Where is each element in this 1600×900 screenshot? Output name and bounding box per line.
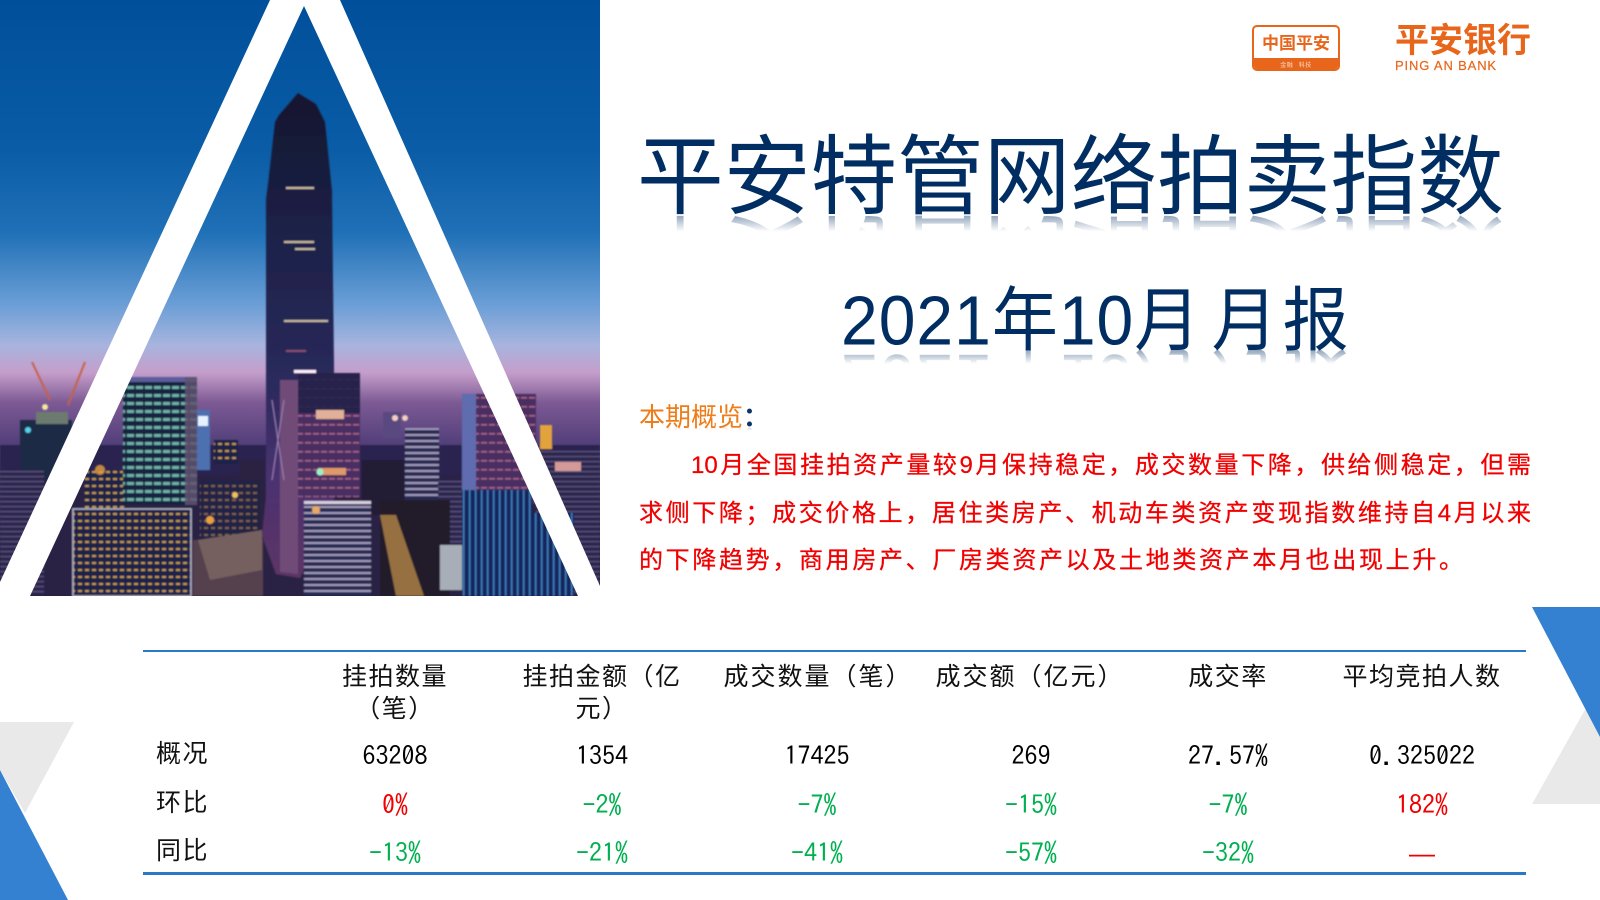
data table: -13% — [369, 840, 421, 866]
data table: 182% — [1396, 792, 1448, 818]
data table: 27. 57% — [1188, 743, 1268, 769]
data table: -21% — [576, 840, 628, 866]
data table: -2% — [582, 792, 622, 818]
data table: 1354 — [576, 743, 628, 769]
data table: （笔） — [355, 689, 435, 725]
data table: -41% — [791, 840, 843, 866]
white triangle frame — [0, 0, 600, 596]
logo: Ping An group — [1252, 25, 1340, 71]
data table: — — [1409, 838, 1435, 868]
data table: -32% — [1202, 840, 1254, 866]
data table: 同比 — [156, 831, 209, 867]
data table: 63208 — [362, 743, 428, 769]
distant city — [0, 362, 600, 596]
logo: Ping An Bank — [1395, 13, 1531, 73]
data table: -15% — [1005, 792, 1057, 818]
data table: 0% — [382, 792, 408, 818]
main tower — [262, 93, 334, 578]
data table: 元） — [575, 689, 628, 725]
decoration: right corner triangles — [1532, 607, 1600, 804]
overview paragraph: 的下降趋势，商用房产、厂房类资产以及土地类资产本月也出现上升。 — [639, 547, 1463, 574]
logo group name: 中国平安 — [1262, 29, 1330, 54]
office towers — [123, 377, 197, 505]
overview paragraph: 10月全国挂拍资产量较9月保持稳定，成交数量下降，供给侧稳定，但需 — [691, 452, 1531, 479]
data table: 概况 — [156, 734, 209, 770]
overview heading: 本期概览： — [639, 397, 769, 434]
logo tagline band — [1254, 58, 1338, 71]
data table — [143, 650, 1526, 875]
overview paragraph: 求侧下降；成交价格上，居住类房产、机动车类资产变现指数维持自4月以来 — [639, 500, 1531, 527]
data table: 成交数量（笔） — [723, 657, 912, 693]
data table: 成交额（亿元） — [935, 657, 1124, 693]
photo panel: city skyline with white triangle — [0, 0, 600, 596]
data table: -7% — [1208, 792, 1248, 818]
data table: 挂拍金额（亿 — [522, 657, 682, 693]
data table: 269 — [1012, 743, 1050, 769]
logo tagline band: 金融 科技 — [1280, 60, 1312, 69]
overview paragraph — [639, 452, 1531, 574]
data table: 0. 325022 — [1369, 743, 1475, 769]
data table: 平均竞拍人数 — [1342, 657, 1502, 693]
logo bank Chinese name: 平安银行 — [1395, 13, 1531, 62]
subtitle: report date: 2021年10月 月报 — [841, 281, 1350, 359]
data table: -7% — [798, 792, 836, 818]
data table: 17425 — [784, 743, 850, 769]
data table: 成交率 — [1188, 657, 1268, 693]
data table: -57% — [1005, 840, 1057, 866]
data table: 环比 — [156, 783, 209, 819]
data table: 挂拍数量 — [342, 657, 448, 693]
logo bank English name: PING AN BANK — [1395, 58, 1497, 73]
decoration: left corner triangles — [0, 722, 74, 900]
title: 平安特管网络拍卖指数 — [637, 130, 1504, 226]
